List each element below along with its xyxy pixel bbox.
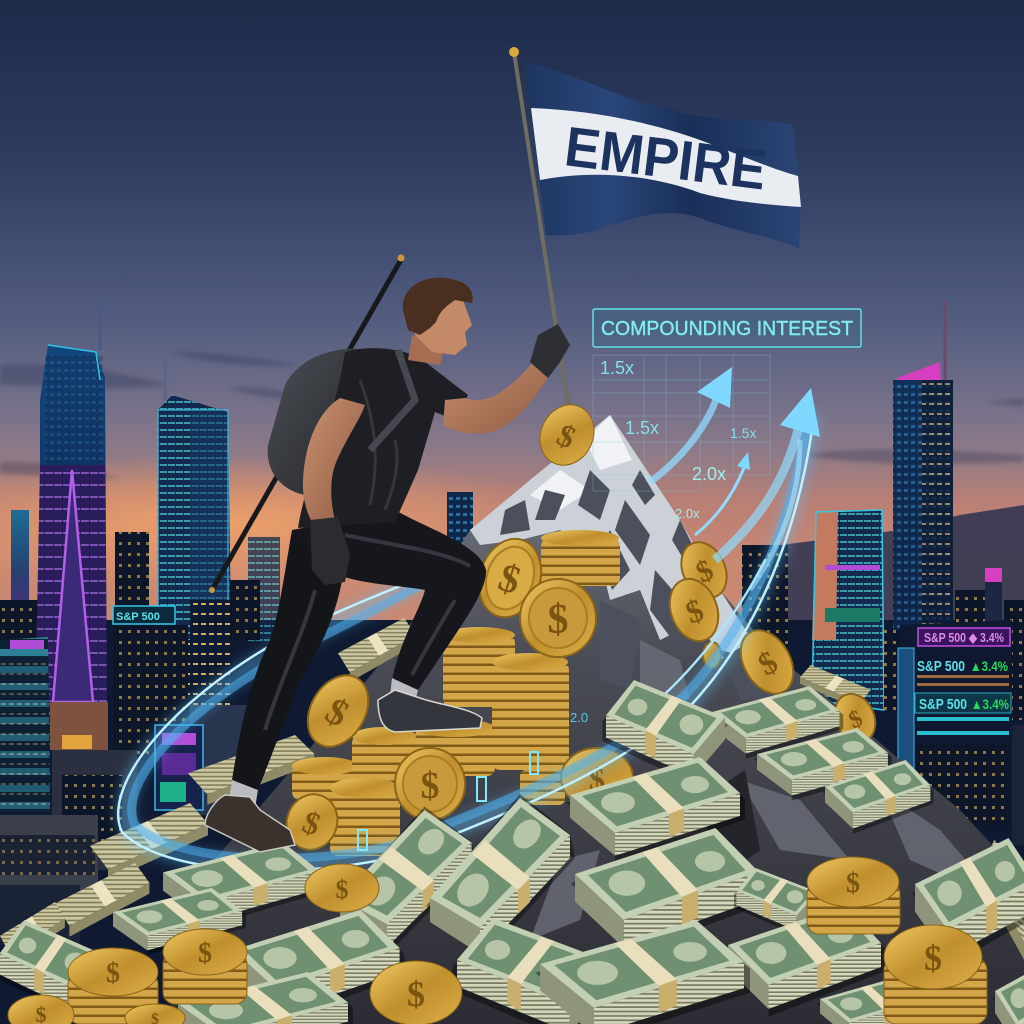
large coins on mountain [279,531,883,857]
coin [395,748,465,820]
coin [279,787,345,857]
stack: top of mountain [541,530,620,586]
tower: behind climber [248,537,280,642]
small magenta tower [985,568,1002,626]
coin at summit: $ [552,416,581,456]
distant hills right [780,505,1024,640]
stack: lower right [884,925,987,1024]
coin: $ [589,761,605,797]
coin [827,687,883,749]
label 1.5x top: 1.5x [600,358,634,378]
stack: lower left [163,929,247,1004]
ribbon data tick [477,777,486,801]
low brick block [0,815,98,890]
coin [296,665,380,757]
face [410,289,472,355]
ticker S&P second row: S&P 500 [919,696,967,713]
ticker gain second row: ▲3.4% [971,696,1009,712]
near arm [303,398,365,522]
tower: distant blocks [0,600,40,650]
dark rooftops [0,885,80,945]
label 1.5x right: 1.5x [730,425,756,441]
coin: flat on cash: $ [336,875,348,904]
arrow: small growth [695,452,750,535]
tower right of arrows [742,545,788,655]
low grey building [52,750,137,870]
stack: right: $ [846,868,860,899]
rock body [170,415,1024,1024]
sunset horizon glow [0,455,600,595]
near glove [310,517,350,585]
coin: corner [8,995,74,1024]
skyline: right towers [447,300,1024,845]
front sock [390,678,418,702]
chart grid [593,355,770,491]
snow cap [470,415,752,660]
glowing growth ribbon [118,420,812,870]
hair [403,278,473,335]
tower: mid blue [115,532,149,612]
tower: teal striped left [0,637,50,812]
heading text: COMPOUNDING INTEREST [601,318,853,340]
stack: beside foot [352,727,416,781]
pale money bundles, upper ridge [0,618,1024,982]
back leg [232,530,345,790]
coin: $ [845,705,867,734]
coin: bottom centre [370,961,462,1024]
ribbon label: 2.0 [570,710,588,725]
flag cloth [525,62,801,249]
far tower behind mountain [447,492,473,552]
label 2.0x: 2.0x [692,464,726,484]
arrow: upper growth [650,367,732,482]
stack: bottom left [68,948,158,1024]
coin: $ [318,690,356,736]
backpack [268,349,368,495]
stack: lower left: $ [198,938,212,969]
coin stacks behind climber [292,530,620,856]
coin: $ [681,591,708,631]
coin: flat on cash [305,864,379,912]
stack: bottom left: $ [106,958,120,989]
label 1.5x mid: 1.5x [625,418,659,438]
building with neon billboard [155,705,250,815]
coin: $ [752,643,783,682]
stack: tallest [492,653,569,770]
t-shirt torso [298,348,468,528]
climber [205,254,570,852]
purple ticker sign: S&P 500 ◆ 3.4% [924,630,1004,645]
stack: centre front [415,719,495,776]
raised glove [530,324,570,378]
coin: bottom centre: $ [407,974,425,1014]
neck [408,335,445,365]
coin: small fallen [703,642,721,668]
tower: blue grid tower [158,350,232,705]
coin [730,621,804,703]
coin [561,748,633,808]
snow highlight near summit [530,415,632,510]
flag [509,47,801,418]
lower rock streaks [530,640,1000,940]
back sock [229,780,258,808]
stack: lower middle [330,778,400,856]
coin: $ [420,765,440,807]
cash bundles [0,680,1024,1024]
tower: purple spire tower [35,293,108,750]
raised arm [443,360,550,434]
S&P ticker building [898,620,1012,830]
coin: $ [548,597,568,643]
tower: thin far left [11,510,29,635]
trekking pole [209,254,404,593]
coin: $ [493,554,526,603]
mountain [170,415,1024,1024]
tower at far right edge [1012,725,1024,845]
legging sheen [265,535,470,730]
front shoe [378,690,482,732]
label 2.0x small: 2.0x [675,506,700,521]
dark city base [0,620,1024,1024]
coin [673,535,735,605]
ticker gain green row: ▲3.4% [970,658,1008,674]
heading box [593,309,861,347]
tower with cyan ticker sign [113,606,233,760]
flag white band [531,108,801,207]
flag pole [514,52,570,418]
skyline: left towers [0,293,280,945]
ribbon data tick [530,752,538,774]
city glow blocks [955,590,985,630]
front leg [292,510,486,690]
stack: right [807,857,900,934]
tower with cyan ticker sign: S&P 500 [116,611,160,623]
stack: centre tall [443,627,515,707]
tall tower with magenta crown [893,300,953,630]
coin [469,531,551,625]
flag word: EMPIRE [562,114,770,202]
coin: $ [691,553,718,589]
pack strap [370,350,415,450]
tower: orange glass [812,510,884,710]
coin: bottom small [125,1004,185,1024]
arrow: large growth [715,388,820,590]
back shoe [205,795,295,852]
coin [661,572,727,648]
rock shards on snow [500,470,790,700]
stack: near big coin [520,770,565,805]
stack: low left [292,757,358,800]
coin [520,579,596,657]
wispy clouds [0,352,1024,478]
coin at summit [530,396,604,474]
ribbon data tick [358,830,367,850]
coin: $ [298,803,325,843]
coin stacks foreground [8,857,987,1024]
compounding interest HUD [593,309,861,590]
stack: lower right: $ [924,938,942,978]
pole finial [509,47,519,57]
shirt fold highlights [360,380,397,510]
purple ticker sign [918,628,1010,646]
ticker S&P cyan row: S&P 500 [917,658,965,675]
